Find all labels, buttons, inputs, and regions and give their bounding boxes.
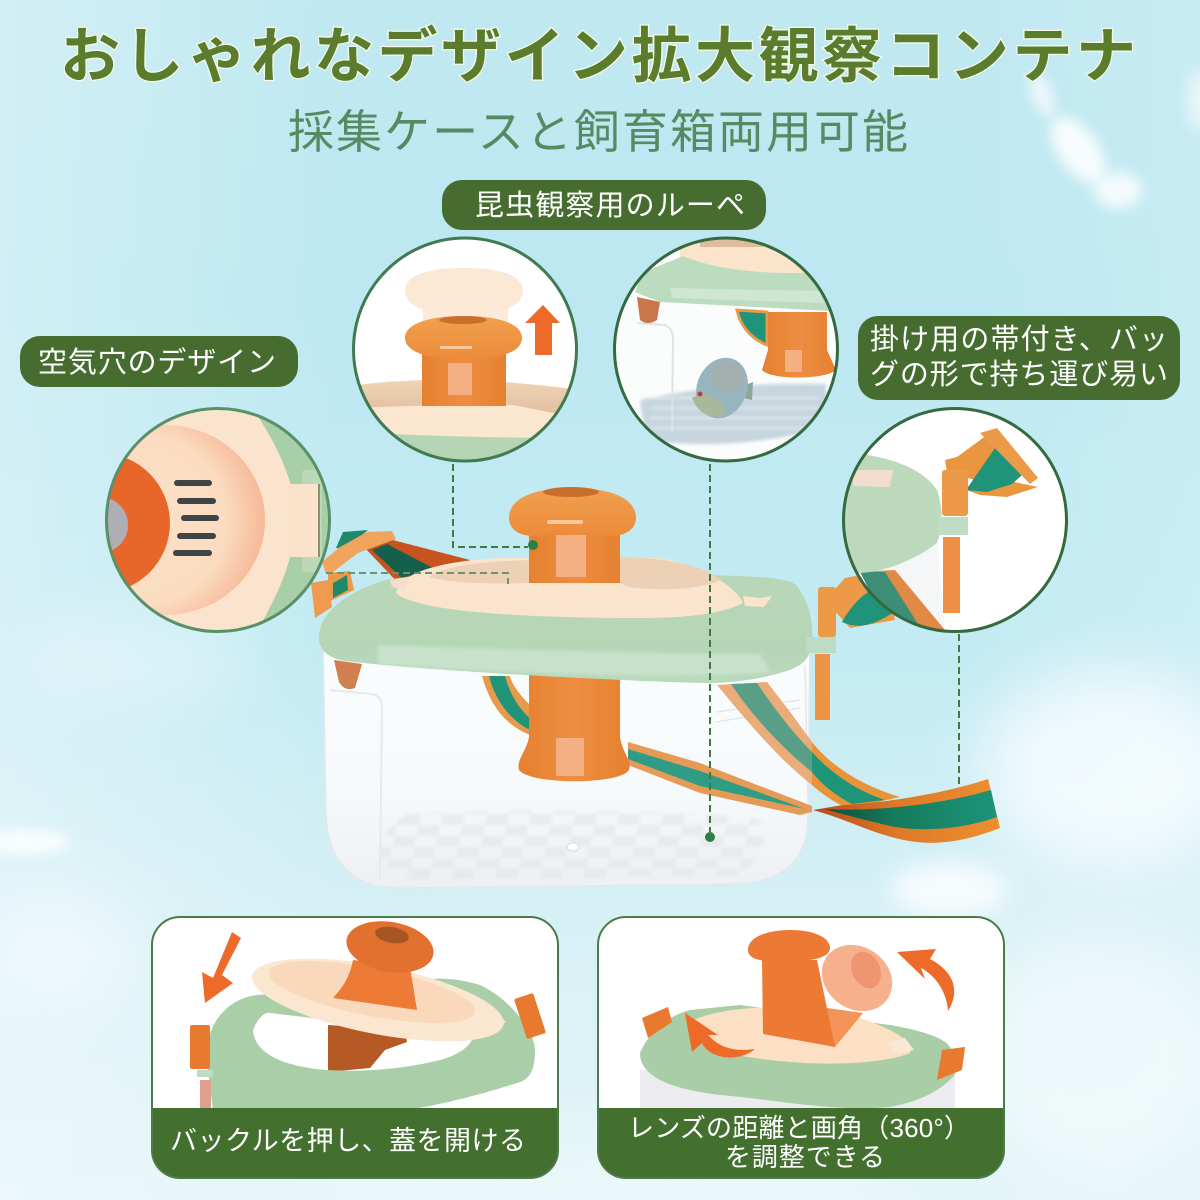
green lid ring	[208, 979, 535, 1110]
strap end ribbon	[813, 779, 1000, 843]
right buckle	[937, 1047, 965, 1080]
label: magnifier pill	[442, 180, 766, 230]
subtitle: 採集ケースと飼育箱両用可能	[288, 106, 908, 158]
caption bar	[152, 1108, 558, 1178]
orange tube base	[110, 458, 170, 586]
dashed leader: air holes	[326, 573, 508, 584]
leader dot: fish view	[705, 832, 715, 842]
right moulded window	[716, 665, 808, 800]
tape	[943, 537, 960, 613]
panel: adjust the lens	[598, 917, 1004, 1178]
air slots	[176, 483, 216, 553]
lens tube below lid	[518, 670, 630, 781]
ghost lens position	[809, 931, 905, 1047]
caption text: を調整できる	[725, 1142, 885, 1172]
ghost raised lens	[405, 268, 523, 325]
lens tube above lid	[509, 487, 636, 583]
orange clip	[637, 297, 660, 323]
main product: insect observation container	[311, 487, 1000, 888]
latch tab	[887, 1038, 914, 1054]
peach recess	[127, 425, 265, 615]
transparent body and strap	[860, 544, 945, 630]
left buckle	[190, 1025, 213, 1110]
strap outside the container	[812, 742, 900, 806]
discus fish	[692, 358, 753, 418]
lid	[835, 455, 942, 573]
leader dot: magnifier	[528, 540, 538, 550]
top cream disc	[680, 242, 805, 273]
back strap, top left	[322, 530, 470, 585]
grey tube opening	[108, 498, 128, 550]
band	[938, 517, 968, 535]
cream disc	[690, 1007, 911, 1064]
circle outline: strap	[844, 408, 1066, 632]
caption text	[628, 1113, 970, 1172]
moulded window	[637, 323, 673, 432]
label: air holes pill: 空気穴のデザイン	[38, 346, 276, 379]
circle: air holes detail	[108, 410, 328, 630]
curved arrow: right	[897, 949, 954, 1011]
left buckle	[311, 571, 354, 618]
orange inner clip	[334, 660, 362, 689]
left moulded window	[330, 690, 382, 880]
caption bar	[598, 1108, 1004, 1178]
label: strap pill: グの形で持ち運び易い	[870, 358, 1168, 391]
left buckle	[642, 1007, 672, 1038]
tan disc surface	[360, 380, 568, 413]
brown inner lens	[328, 1025, 407, 1072]
panel border	[152, 917, 558, 1178]
orange down arrow	[202, 932, 241, 1003]
circle outline: fish	[614, 238, 838, 461]
circle outline: lens pull-up	[354, 238, 576, 461]
strap behind lens	[737, 310, 767, 345]
strap fold	[945, 428, 1038, 497]
curved arrow: left	[685, 1013, 755, 1057]
orange lens handle	[333, 915, 438, 1010]
buckle	[942, 470, 968, 516]
green lid	[640, 1005, 956, 1108]
caption text: バックルを押し、蓋を開ける	[170, 1126, 526, 1156]
dashed leader: fish view	[709, 464, 711, 832]
orange lens	[405, 316, 522, 406]
dashed leader: strap	[958, 634, 960, 785]
drain dot	[567, 843, 579, 851]
dashed leader: magnifier	[453, 464, 528, 547]
cream disc edge	[372, 404, 555, 438]
green lid	[635, 256, 832, 311]
circle: fish inside container	[614, 238, 838, 462]
cream rotating disc	[390, 557, 772, 618]
lid cream tab	[853, 470, 893, 487]
cream lid disc	[162, 410, 290, 630]
up arrow	[525, 305, 560, 355]
panel: open the lid	[152, 915, 558, 1178]
panel border	[598, 917, 1004, 1178]
title: おしゃれなデザイン拡大観察コンテナ	[60, 23, 1136, 90]
lid highlight	[670, 288, 824, 303]
label: strap pill: 掛け用の帯付き、バッ	[870, 323, 1168, 356]
circle: strap and buckle detail	[845, 410, 1065, 630]
circle: lens pull-up detail	[350, 238, 580, 470]
green lid edge	[394, 434, 531, 460]
circle outline: air holes	[106, 408, 330, 632]
label: air holes pill	[20, 336, 298, 387]
label: strap pill	[858, 316, 1180, 400]
latch tab	[288, 470, 322, 572]
lid front highlight	[377, 645, 770, 675]
lens tube	[762, 312, 836, 378]
checker floor	[380, 810, 764, 880]
caption text: レンズの距離と画角（360°）	[628, 1113, 970, 1143]
orange lens	[748, 930, 835, 1047]
water	[640, 384, 826, 444]
back strap, top right	[825, 570, 895, 628]
cream lid plate	[252, 958, 506, 1042]
strap running through the container	[482, 676, 812, 815]
tan disc top	[700, 240, 766, 247]
transparent container body	[323, 640, 810, 888]
right buckle and tape	[806, 587, 836, 720]
label: magnifier pill: 昆虫観察用のルーペ	[475, 189, 745, 222]
lid	[319, 575, 812, 683]
right buckle	[514, 993, 546, 1039]
transparent body	[640, 1070, 955, 1112]
